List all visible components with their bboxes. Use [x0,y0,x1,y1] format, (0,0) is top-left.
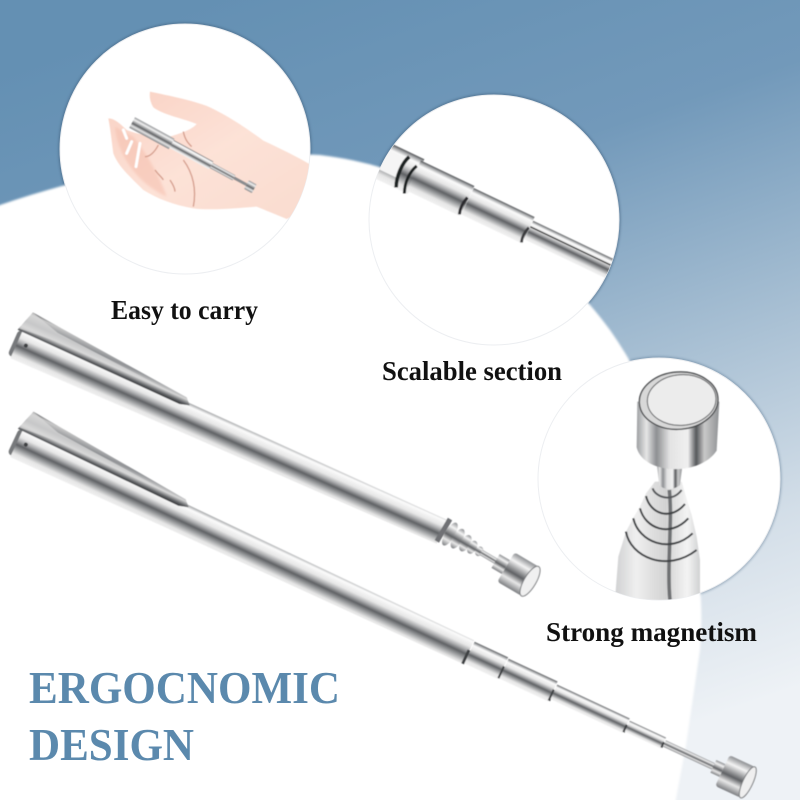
title [29,662,340,770]
short pen with spring tip [6,310,544,599]
title line 2: DESIGN [29,719,194,770]
long extended pen [6,409,767,800]
large white curved backdrop [0,154,701,800]
icon: magnet tip close-up [615,369,721,600]
label: easy to carry: Easy to carry [111,295,258,325]
label: scalable section: Scalable section [382,356,562,386]
icon: hand holding pen [108,92,309,219]
label: strong magnetism: Strong magnetism [546,617,757,647]
panel: scalable section lens [350,95,627,345]
title line 1: ERGOCNOMIC [29,662,340,713]
panel: easy to carry lens [60,24,310,274]
panel: strong magnetism lens [538,358,780,600]
icon: telescopic sections close-up [376,144,613,278]
